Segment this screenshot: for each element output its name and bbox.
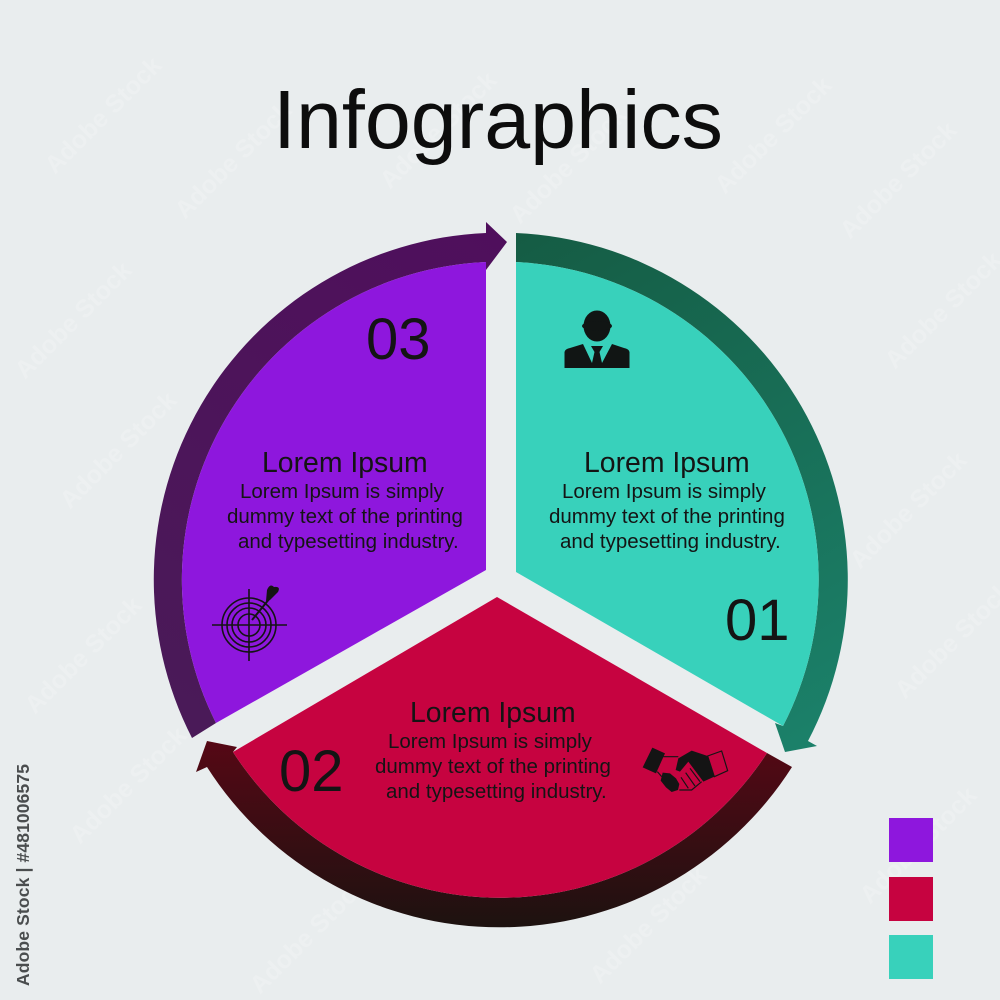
number: 02: 02 [279,739,344,804]
text block: 03: dummy text of the printing [227,505,463,528]
watermark pattern: Adobe Stock [709,71,837,199]
watermark pattern: Adobe Stock [374,66,502,194]
legend swatch: red [889,877,933,921]
text block: 02: Lorem Ipsum is simply [388,730,593,753]
watermark pattern: Adobe Stock [169,96,297,224]
icon: handshake [643,748,728,792]
red sector [233,597,767,898]
watermark pattern: Adobe Stock [64,721,192,849]
watermark pattern: Adobe Stock [244,871,372,999]
legend swatch: purple [889,818,933,862]
legend [889,818,933,979]
panel: 02 red segment [196,597,792,927]
watermark pattern: Adobe Stock [504,101,632,229]
text block: 02: and typesetting industry. [386,780,607,803]
watermark pattern: Adobe Stock [844,446,972,574]
watermark pattern: Adobe Stock [9,256,137,384]
heading: 03: Lorem Ipsum [262,447,428,479]
text block: 03: and typesetting industry. [238,530,459,553]
watermark pattern: Adobe Stock [834,116,962,244]
panel: 01 teal segment [516,233,848,752]
icon: businessman [564,310,630,368]
number: 01: 01 [725,588,790,653]
watermark pattern: Adobe Stock [584,861,712,989]
title: Infographics [273,73,723,166]
watermark pattern: Adobe Stock [854,781,982,909]
purple outer arrow band [154,222,507,738]
text block: 01: Lorem Ipsum is simply [562,480,767,503]
number: 03: 03 [366,307,431,372]
text block: 01: dummy text of the printing [549,505,785,528]
stock credit: Adobe Stock | #481006575 [13,764,33,986]
purple sector [182,262,486,723]
watermark pattern: Adobe Stock [39,51,167,179]
icon: target with dart [212,586,287,661]
heading: 02: Lorem Ipsum [410,697,576,729]
teal sector [516,262,819,726]
panel: 03 purple segment [154,222,507,738]
legend swatch: teal [889,935,933,979]
watermark pattern: Adobe Stock [19,591,147,719]
red outer arrow band [196,741,792,927]
text block: 01: and typesetting industry. [560,530,781,553]
text block: 02: dummy text of the printing [375,755,611,778]
text block: 03: Lorem Ipsum is simply [240,480,445,503]
watermark pattern: Adobe Stock [54,386,182,514]
teal outer arrow band [516,233,848,752]
heading: 01: Lorem Ipsum [584,447,750,479]
